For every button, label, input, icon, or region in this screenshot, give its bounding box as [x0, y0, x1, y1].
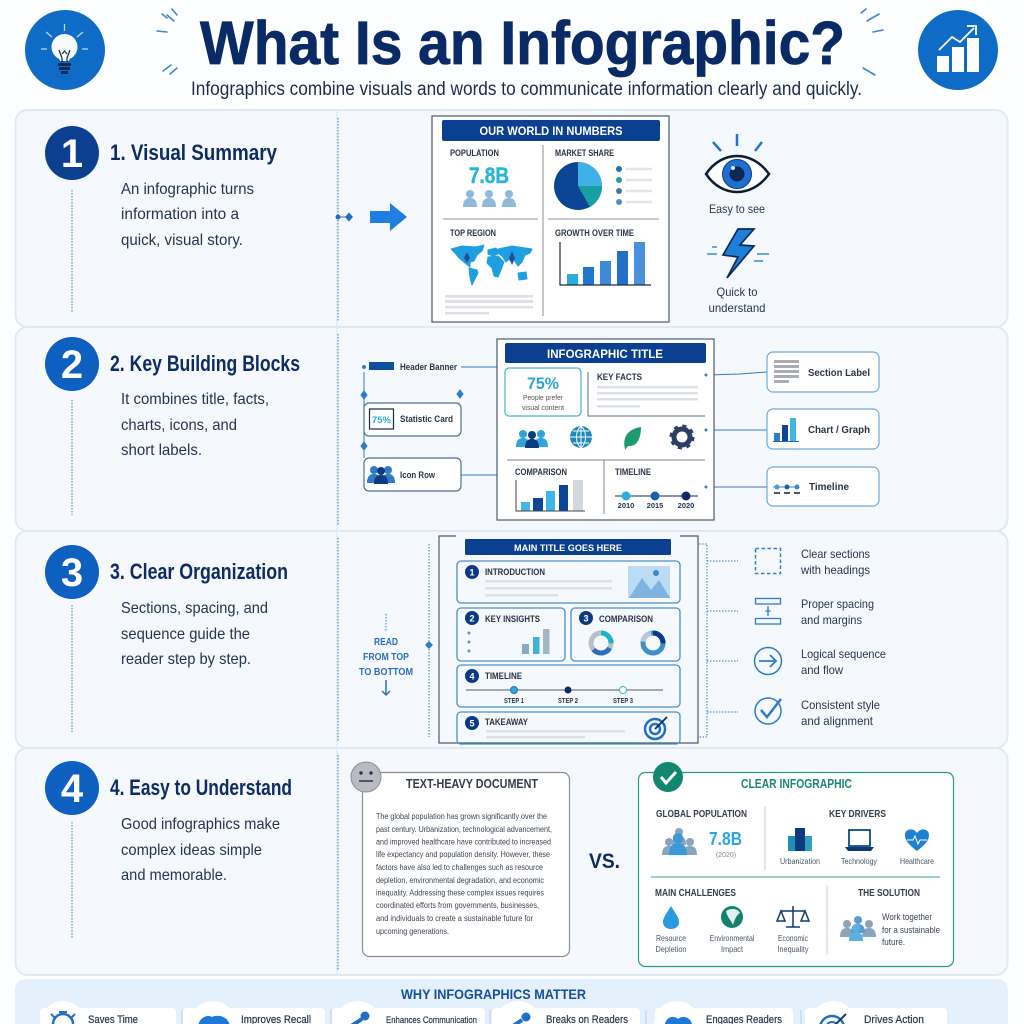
callout: chart graph — [767, 409, 879, 449]
main challenges — [655, 888, 809, 954]
key drivers — [780, 809, 934, 866]
label: clear sections: Clear sections — [801, 547, 870, 561]
statistic card: 75% — [527, 374, 559, 393]
title banner: INFOGRAPHIC TITLE — [547, 347, 663, 361]
timeline: 2020 — [678, 501, 694, 510]
section 1 introduction: 1 — [469, 568, 475, 578]
sample infographic: our world in numbers — [432, 116, 669, 322]
document paragraph: past century. Urbanization, technological advancement, — [376, 824, 552, 834]
top region map: TOP REGION — [450, 228, 496, 238]
text: summary description: information into a — [121, 206, 239, 223]
label: logical sequence — [801, 647, 886, 677]
main challenges: Resource — [656, 933, 686, 943]
label: consistent style: and alignment — [801, 714, 874, 728]
market share pie — [554, 148, 652, 210]
section 5 takeaway: 5 — [469, 718, 475, 728]
growth bar chart — [555, 228, 651, 285]
arrow — [370, 203, 407, 231]
step number 4 — [45, 761, 99, 815]
icon: check badge — [653, 762, 683, 792]
benefit: breaks on readers — [510, 1012, 628, 1024]
document paragraph: life expectancy and population density. However, these — [376, 849, 550, 859]
text: building blocks description: short labels. — [121, 442, 202, 459]
panel: 3 clear organization — [15, 531, 1008, 1024]
document title: TEXT-HEAVY DOCUMENT — [406, 777, 538, 791]
text: organization description: reader step by step. — [121, 651, 251, 668]
timeline — [615, 467, 698, 510]
top region map — [450, 228, 532, 285]
section 1 introduction: INTRODUCTION — [485, 567, 545, 577]
heading 4: 4. Easy to Understand — [110, 775, 292, 800]
card title: CLEAR INFOGRAPHIC — [741, 777, 852, 791]
key facts: KEY FACTS — [597, 372, 642, 382]
benefit: enhances communication — [348, 1012, 477, 1024]
panel: why infographics matter — [15, 979, 1008, 1024]
diagram: layout wireframe — [439, 536, 698, 744]
section 1 introduction — [457, 561, 680, 603]
title banner — [505, 343, 706, 363]
global population stat: 7.8B — [709, 829, 742, 849]
bracket with dotted leaders — [699, 544, 738, 737]
icon: growth chart badge — [918, 10, 998, 90]
decoration: title sparks left — [157, 9, 177, 74]
icon: lightning bolt — [707, 229, 769, 278]
document paragraph: coordinated efforts from governments, businesses, — [376, 900, 539, 910]
text: understanding description: complex ideas simple — [121, 842, 262, 859]
section 4 timeline — [457, 665, 680, 707]
step number 2 — [45, 337, 99, 391]
callout: section label: Section Label — [808, 367, 870, 379]
comparison bars — [515, 467, 585, 511]
vs label: VS. — [589, 850, 620, 873]
step number 3 — [45, 545, 99, 599]
callout: timeline: Timeline — [809, 481, 849, 493]
label: proper spacing: and margins — [801, 613, 862, 627]
label: quick to understand — [708, 285, 766, 315]
callout: section label — [767, 352, 879, 392]
label: logical sequence: Logical sequence — [801, 647, 886, 661]
label: proper spacing — [801, 597, 874, 627]
main challenges: MAIN CHALLENGES — [655, 888, 736, 899]
benefit: improves recall — [198, 1014, 311, 1024]
document paragraph: depletion, environmental degradation, and economic — [376, 875, 545, 885]
label: quick to understand: Quick to — [716, 285, 758, 299]
reading direction note — [359, 614, 413, 695]
section 5 takeaway: TAKEAWAY — [485, 717, 528, 727]
label: clear sections: with headings — [800, 563, 870, 577]
key drivers: Technology — [841, 856, 878, 866]
callout: statistic card: 75% — [372, 415, 392, 426]
reading direction note: READ — [374, 636, 398, 648]
the solution: Work together — [882, 912, 932, 923]
icon: flow arrow — [754, 648, 782, 674]
the solution: future. — [882, 937, 905, 948]
key facts — [588, 372, 705, 416]
panel: 4 easy to understand — [15, 748, 1008, 1024]
key drivers: Urbanization — [780, 856, 820, 866]
heading 2: 2. Key Building Blocks — [110, 351, 300, 376]
text: summary description: An infographic turns — [121, 181, 254, 198]
heading 1: 1. Visual Summary — [110, 140, 278, 165]
panel: 2 key building blocks — [15, 327, 1008, 1024]
section 2 key insights: KEY INSIGHTS — [485, 614, 540, 624]
document paragraph: upcoming generations. — [376, 926, 449, 936]
callout: statistic card — [364, 403, 461, 436]
icon: neutral face — [351, 762, 381, 792]
reading direction note: TO BOTTOM — [359, 666, 413, 678]
global population stat — [656, 809, 747, 859]
step number 1 — [45, 126, 99, 180]
text: building blocks description: It combines title, facts, — [121, 391, 269, 408]
icon: eye — [706, 134, 769, 192]
section 5 takeaway — [457, 712, 680, 744]
icon: lightbulb badge — [25, 10, 105, 90]
main challenges: Environmental — [710, 933, 755, 943]
comparison bars: COMPARISON — [515, 467, 567, 477]
document paragraph: inequality. Addressing these complex issues requires — [376, 888, 544, 898]
population stat: POPULATION — [450, 148, 499, 158]
market share pie: MARKET SHARE — [555, 148, 614, 158]
section 3 comparison: COMPARISON — [599, 614, 653, 624]
decoration: title sparks right — [861, 9, 883, 75]
label: consistent style — [801, 698, 880, 728]
step number 4: 4 — [61, 767, 84, 811]
step number 3: 3 — [61, 551, 83, 595]
section 2 key insights — [457, 608, 565, 661]
title banner: MAIN TITLE GOES HERE — [514, 543, 622, 554]
benefit: engages readers — [664, 1014, 782, 1024]
step number 1: 1 — [61, 132, 83, 176]
key drivers: KEY DRIVERS — [829, 809, 886, 820]
document paragraph: and improved healthcare have contributed to increased — [376, 836, 551, 846]
icon row — [516, 426, 693, 450]
diagram: infographic anatomy — [497, 339, 714, 520]
banner: OUR WORLD IN NUMBERS — [480, 126, 623, 138]
label: easy to see: Easy to see — [709, 202, 765, 216]
icon: check circle — [755, 698, 781, 724]
section 3 comparison — [571, 608, 680, 661]
card: clear infographic — [638, 762, 954, 966]
population stat — [450, 148, 516, 207]
section 4 timeline: STEP 2 — [558, 698, 578, 705]
callout: header banner: Header Banner — [400, 362, 457, 372]
label: quick to understand: understand — [708, 301, 766, 315]
global population stat: GLOBAL POPULATION — [656, 809, 747, 820]
document paragraph: The global population has grown significantly over the — [376, 811, 547, 821]
connector node — [336, 212, 353, 222]
icon: spacing — [756, 598, 780, 624]
population stat: 7.8B — [469, 163, 509, 188]
reading direction note: FROM TOP — [363, 651, 409, 663]
callout: icon row: Icon Row — [400, 470, 436, 480]
label: logical sequence: and flow — [801, 663, 843, 677]
main challenges: Inequality — [778, 944, 809, 954]
title banner — [465, 539, 671, 555]
card: text-heavy document — [351, 762, 570, 956]
icon: dashed square — [756, 548, 780, 574]
label: proper spacing: Proper spacing — [801, 597, 874, 611]
bottom heading: WHY INFOGRAPHICS MATTER — [401, 986, 586, 1002]
statistic card: People prefer — [523, 393, 563, 402]
timeline: 2015 — [647, 501, 663, 510]
callout: timeline — [767, 467, 879, 506]
callout: statistic card: Statistic Card — [400, 414, 453, 424]
text: summary description: quick, visual story. — [121, 232, 243, 249]
text: organization description — [121, 600, 268, 668]
label: consistent style: Consistent style — [801, 698, 880, 712]
label: clear sections — [800, 547, 870, 577]
step number 2: 2 — [61, 343, 83, 387]
section 4 timeline: TIMELINE — [485, 671, 522, 681]
section 4 timeline: 4 — [469, 672, 475, 682]
the solution: for a sustainable — [882, 925, 940, 936]
text: organization description: Sections, spacing, and — [121, 600, 268, 617]
section 3 comparison: 3 — [583, 614, 589, 624]
document paragraph: and individuals to create a sustainable future for — [376, 913, 533, 923]
benefit: drives action — [820, 1014, 924, 1024]
callout: chart graph: Chart / Graph — [808, 424, 870, 436]
connector lines — [361, 367, 767, 487]
title: What Is an Infographic? — [200, 9, 845, 77]
callout: header banner — [362, 362, 457, 372]
main challenges: Impact — [721, 944, 744, 954]
text: summary description — [121, 181, 254, 249]
document paragraph: factors have also led to challenges such as resource — [376, 862, 543, 872]
callout: icon row — [364, 458, 461, 491]
subtitle: Infographics combine visuals and words to communicate information clearly and quickly. — [191, 79, 862, 100]
section 4 timeline: STEP 3 — [613, 698, 633, 705]
text: understanding description — [121, 816, 280, 884]
text: organization description: sequence guide the — [121, 626, 250, 643]
statistic card: visual content — [522, 403, 565, 412]
global population stat: (2020) — [716, 852, 736, 859]
timeline: TIMELINE — [615, 467, 651, 477]
text: understanding description: Good infographics make — [121, 816, 280, 833]
benefit: saves time — [51, 1012, 138, 1024]
main challenges: Economic — [778, 933, 809, 943]
timeline: 2010 — [618, 501, 634, 510]
banner — [442, 120, 660, 141]
text: understanding description: and memorable. — [121, 867, 227, 884]
the solution — [840, 888, 940, 948]
heading 3: 3. Clear Organization — [110, 559, 288, 584]
section 4 timeline: STEP 1 — [504, 698, 524, 705]
text: building blocks description — [121, 391, 269, 459]
main challenges: Depletion — [656, 944, 687, 954]
text: building blocks description: charts, icons, and — [121, 417, 237, 434]
the solution: THE SOLUTION — [858, 888, 920, 899]
document paragraph — [376, 811, 552, 936]
statistic card — [505, 368, 581, 416]
section 2 key insights: 2 — [469, 614, 475, 624]
growth bar chart: GROWTH OVER TIME — [555, 228, 634, 238]
key drivers: Healthcare — [900, 856, 934, 866]
